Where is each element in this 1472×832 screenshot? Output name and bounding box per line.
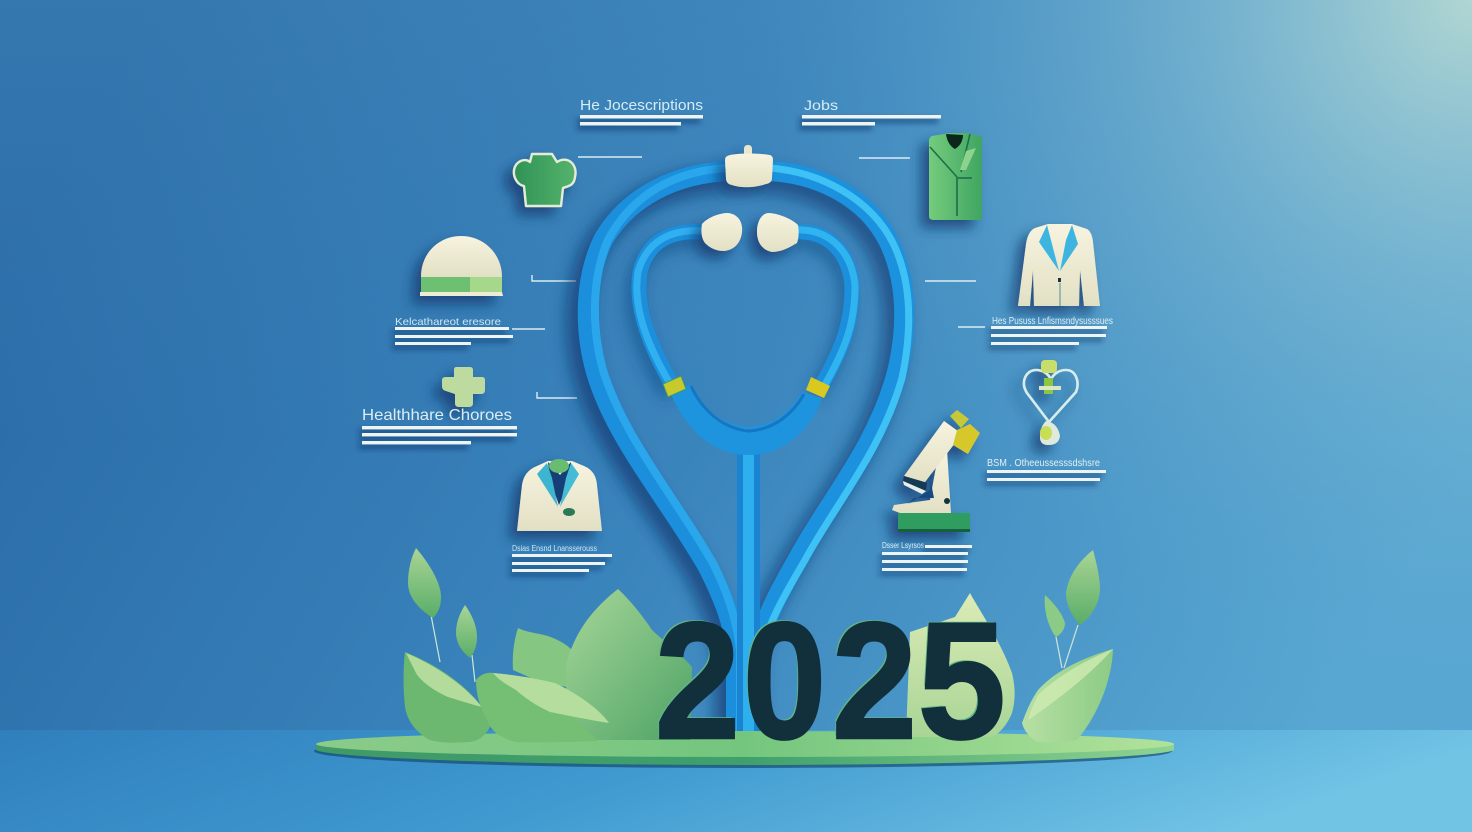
year 2025: 2 (655, 588, 740, 773)
year 2025: 5 (916, 586, 1004, 772)
heading: jobs: Jobs (804, 97, 838, 113)
stems (431, 615, 475, 682)
text block: right upper: Hes Pususs Lnfismsndysusssues (992, 316, 1113, 327)
back leaf (513, 628, 572, 687)
text block: left lower (512, 544, 612, 572)
text block: right lower: Dsser Lsyrsos (882, 540, 924, 550)
text block: right lower (882, 540, 972, 571)
icon: white jacket (1018, 224, 1100, 306)
text block: healthcare choices: Healthhare Choroes (362, 407, 512, 424)
chest piece (670, 385, 822, 455)
year 2025: 2 (653, 586, 738, 771)
year 2025: 0 (743, 589, 826, 774)
icon: green vest (929, 133, 982, 220)
text block: right upper (991, 316, 1113, 345)
text block: left upper (395, 316, 513, 345)
year 2025: 2 (830, 586, 915, 771)
icon: scrub top (514, 154, 576, 206)
icon: nurse cap (420, 236, 503, 296)
small right leaf (1045, 595, 1065, 637)
year 2025: 5 (918, 588, 1006, 774)
plant: left leaves (404, 548, 692, 743)
floor (0, 730, 1472, 832)
icon: lab coat left (517, 459, 602, 531)
text block: healthcare choices (362, 407, 517, 444)
text block: left lower: Dsias Ensnd Lnansserouss (512, 544, 597, 553)
year 2025: 2 (832, 588, 917, 773)
yellow bands (663, 376, 830, 398)
plant: right leaves (906, 550, 1113, 742)
big centre leaf (560, 589, 692, 740)
front leaf (476, 673, 609, 742)
stem (737, 450, 760, 742)
tall right leaf (1066, 550, 1100, 625)
platform (314, 731, 1174, 768)
ear tips (701, 213, 799, 252)
icon: cross (442, 367, 485, 407)
cream leaf (906, 593, 1015, 737)
bowl leaf (404, 652, 490, 743)
outer tube (579, 168, 909, 751)
small leaf (456, 605, 477, 658)
tall leaf (408, 548, 441, 618)
year 2025 (653, 586, 1006, 774)
big right leaf (1022, 649, 1113, 742)
inner tubing (634, 230, 855, 396)
stethoscope (579, 145, 909, 751)
year 2025: 0 (741, 587, 824, 772)
heading: job descriptions (580, 97, 703, 126)
icon: heart stethoscope (1024, 360, 1078, 445)
icon: microscope (892, 410, 980, 532)
headset cap (725, 145, 773, 187)
text block: left upper: Kelcathareot eresore (395, 316, 501, 328)
heading: jobs (802, 97, 941, 126)
text block: right middle (987, 458, 1106, 481)
connector lines (512, 157, 985, 398)
heading: job descriptions: He Jocescriptions (580, 97, 703, 114)
text block: right middle: BSM . Otheeussesssdshsre (987, 458, 1100, 469)
